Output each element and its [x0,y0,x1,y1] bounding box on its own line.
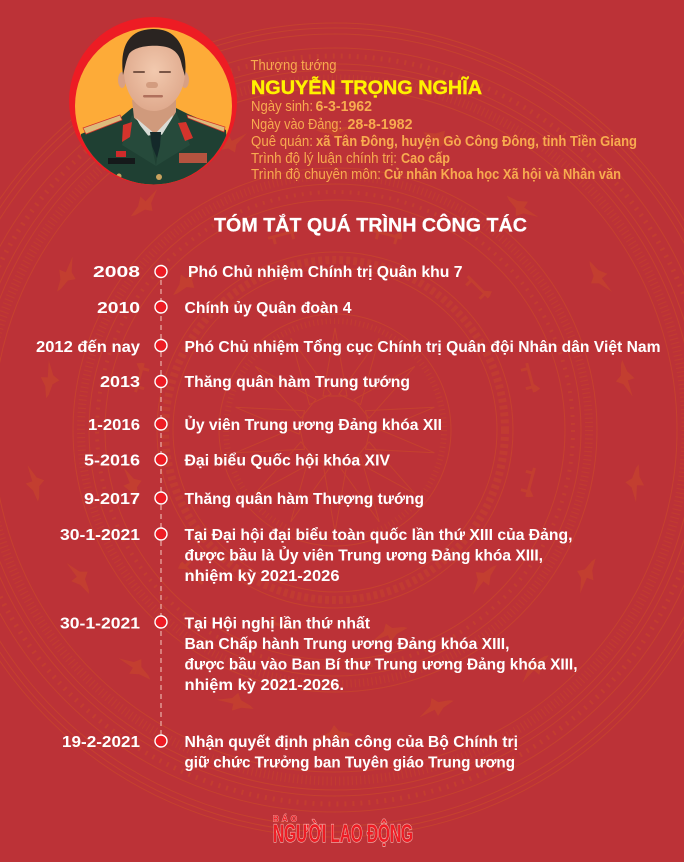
professional level [251,167,621,183]
entry 30-1-2021 plenum: 30-1-2021 [60,616,140,632]
entry 2010: Chính ủy Quân đoàn 4 [184,300,352,317]
entry 2013: Thăng quân hàm Trung tướng [184,374,410,391]
entry 30-1-2021 congress: nhiệm kỳ 2021-2026 [184,568,340,585]
professional level: Cử nhân Khoa học Xã hội và Nhân văn [384,167,621,183]
entry 19-2-2021 [62,734,518,772]
birth date: Ngày sinh: [251,99,313,115]
entry 2008: Phó Chủ nhiệm Chính trị Quân khu 7 [188,264,462,281]
portrait [69,17,237,190]
timeline dashed line [160,271,162,741]
central star [233,328,437,532]
entry 2010 [97,300,352,317]
entry 30-1-2021 plenum [60,616,578,694]
entry 9-2017: 9-2017 [84,491,140,508]
professional level: Trình độ chuyên môn: [251,167,381,183]
birth date [251,99,372,115]
hometown: xã Tân Đông, huyện Gò Công Đông, tỉnh Tiền Giang [316,134,637,150]
hometown: Quê quán: [251,134,313,150]
political theory level: Trình độ lý luận chính trị: [251,151,397,167]
timeline [36,264,660,772]
birth date: 6-3-1962 [316,99,372,115]
entry 1-2016 [88,416,442,434]
entry 30-1-2021 plenum: được bầu vào Ban Bí thư Trung ương Đảng khóa XIII, [184,656,578,674]
entry 30-1-2021 congress: Tại Đại hội đại biểu toàn quốc lần thứ XIII của Đảng, [184,527,572,544]
outer band of birds [22,121,648,744]
political theory level: Cao cấp [401,151,450,167]
entry 30-1-2021 congress [60,527,572,585]
middle band of figures [119,224,541,646]
entry 30-1-2021 plenum: nhiệm kỳ 2021-2026. [184,677,344,694]
entry 5-2016: 5-2016 [84,452,140,470]
entry 19-2-2021: giữ chức Trưởng ban Tuyên giáo Trung ương [184,754,515,772]
party date: Ngày vào Đảng: [251,117,342,133]
entry 2008: 2008 [93,264,141,281]
entry 30-1-2021 congress: 30-1-2021 [60,527,140,544]
entry 9-2017: Thăng quân hàm Thượng tướng [184,491,424,508]
entry 30-1-2021 congress: được bầu là Ủy viên Trung ương Đảng khóa XIII, [184,546,543,564]
newspaper logo: BÁO [273,814,297,824]
entry 30-1-2021 plenum: Tại Hội nghị lần thứ nhất [184,616,370,632]
entry 1-2016: 1-2016 [88,417,140,434]
section heading: TÓM TẮT QUÁ TRÌNH CÔNG TÁC [214,212,527,236]
entry 1-2016: Ủy viên Trung ương Đảng khóa XII [184,416,442,434]
newspaper logo: NGƯỜI LAO ĐỘNG [273,818,413,848]
newspaper logo [273,814,413,848]
entry 5-2016 [84,452,391,470]
entry 2010: 2010 [97,300,140,317]
entry 5-2016: Đại biểu Quốc hội khóa XIV [184,452,391,470]
name and profile block [250,57,637,183]
entry 19-2-2021: 19-2-2021 [62,734,140,751]
entry 19-2-2021: Nhận quyết định phân công của Bộ Chính trị [184,734,518,751]
entry 30-1-2021 plenum: Ban Chấp hành Trung ương Đảng khóa XIII, [184,636,509,653]
entry 2013: 2013 [100,374,140,391]
name: NGUYỄN TRỌNG NGHĨA [251,76,482,99]
party date [251,117,412,133]
rank: Thượng tướng [250,57,336,74]
entry 2012: Phó Chủ nhiệm Tổng cục Chính trị Quân đội Nhân dân Việt Nam [184,339,660,356]
party date: 28-8-1982 [348,117,412,133]
entry 2012: 2012 đến nay [36,339,140,356]
